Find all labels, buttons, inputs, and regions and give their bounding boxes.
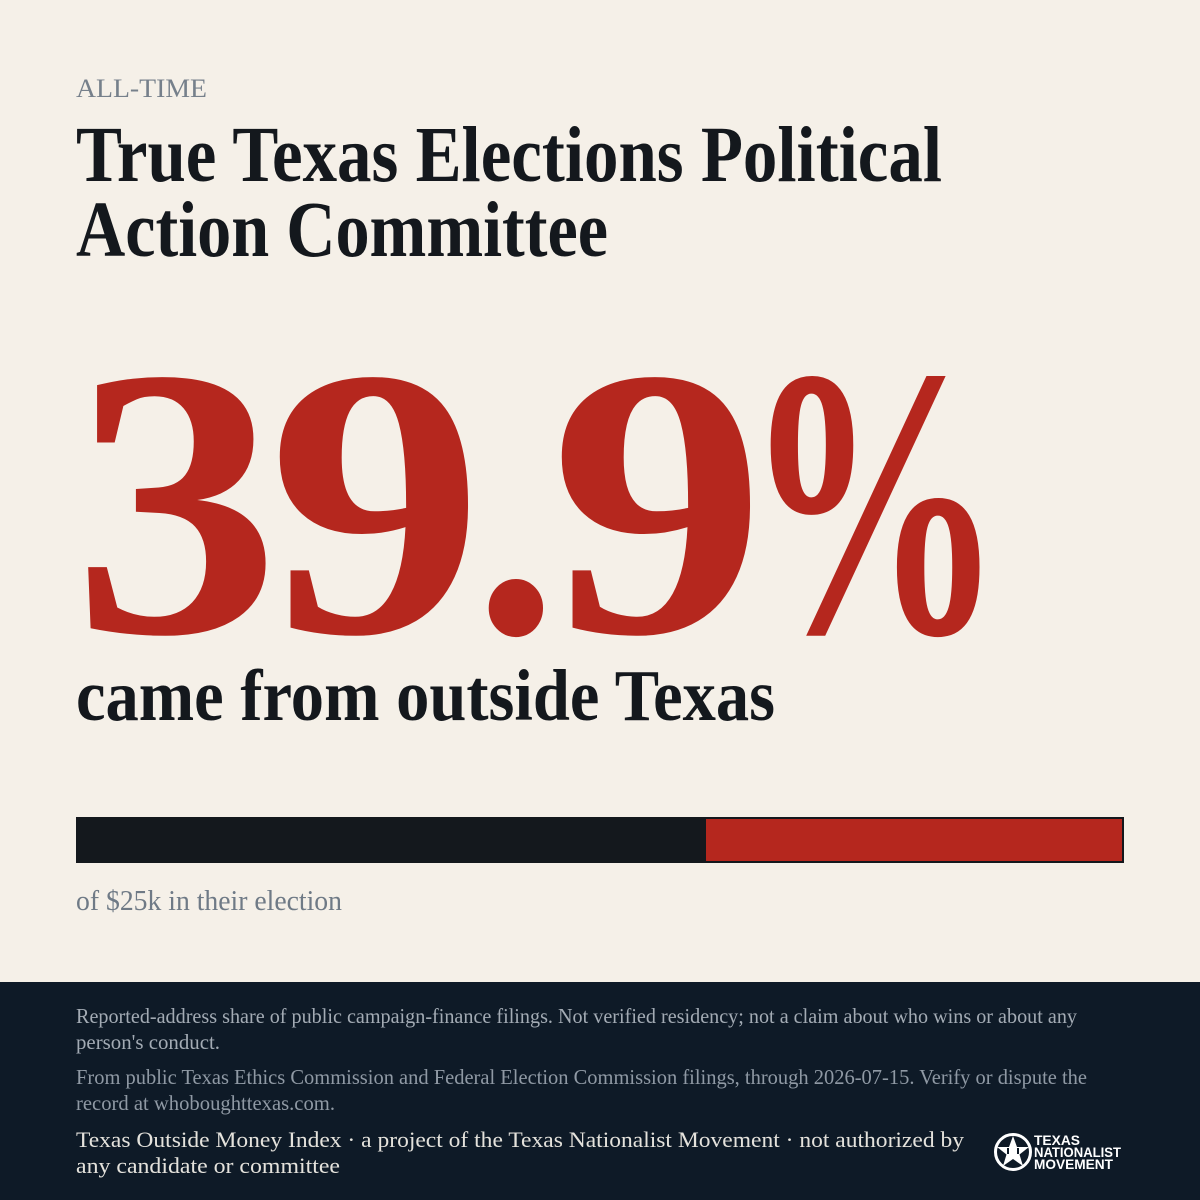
- attribution text: [76, 1127, 965, 1178]
- big statistic: 39.9%: 9: [550, 290, 766, 716]
- attribution text: any candidate or committee: [76, 1153, 340, 1178]
- title: [76, 112, 942, 274]
- logo wordmark: TEXAS: [1034, 1133, 1080, 1148]
- big statistic: 39.9%: 9: [268, 290, 484, 716]
- icon: star in circle: [996, 1134, 1030, 1170]
- disclaimer text: [76, 1004, 1077, 1054]
- stat caption: came from outside Texas: [76, 655, 775, 736]
- big statistic: 39.9%: 3: [73, 290, 280, 716]
- disclaimer text: person's conduct.: [76, 1030, 220, 1054]
- source text: record at whoboughttexas.com.: [76, 1091, 335, 1115]
- bar caption: of $25k in their election: [76, 885, 342, 917]
- logo wordmark: NATIONALIST: [1034, 1145, 1122, 1160]
- title: Action Committee: [76, 187, 608, 274]
- big statistic: 39.9%: .: [474, 313, 558, 709]
- eyebrow: all-time: ALL-TIME: [76, 74, 207, 103]
- source text: [76, 1065, 1087, 1115]
- disclaimer text: Reported-address share of public campaign-finance filings. Not verified residency; not a claim about who wins or about any: [76, 1004, 1077, 1028]
- source text: From public Texas Ethics Commission and Federal Election Commission filings, through 2026-07-15. Verify or dispute the: [76, 1065, 1087, 1089]
- footer panel: [0, 982, 1200, 1200]
- attribution text: Texas Outside Money Index · a project of the Texas Nationalist Movement · not authorized by: [76, 1127, 965, 1152]
- logo: Texas Nationalist Movement: [996, 1133, 1122, 1172]
- logo wordmark: [1034, 1133, 1122, 1172]
- title: True Texas Elections Political: [76, 112, 942, 199]
- progress bar: [76, 817, 1124, 863]
- logo wordmark: MOVEMENT: [1034, 1157, 1114, 1172]
- big statistic: 39.9%: [73, 290, 1004, 716]
- big statistic: 39.9%: %: [744, 290, 1004, 716]
